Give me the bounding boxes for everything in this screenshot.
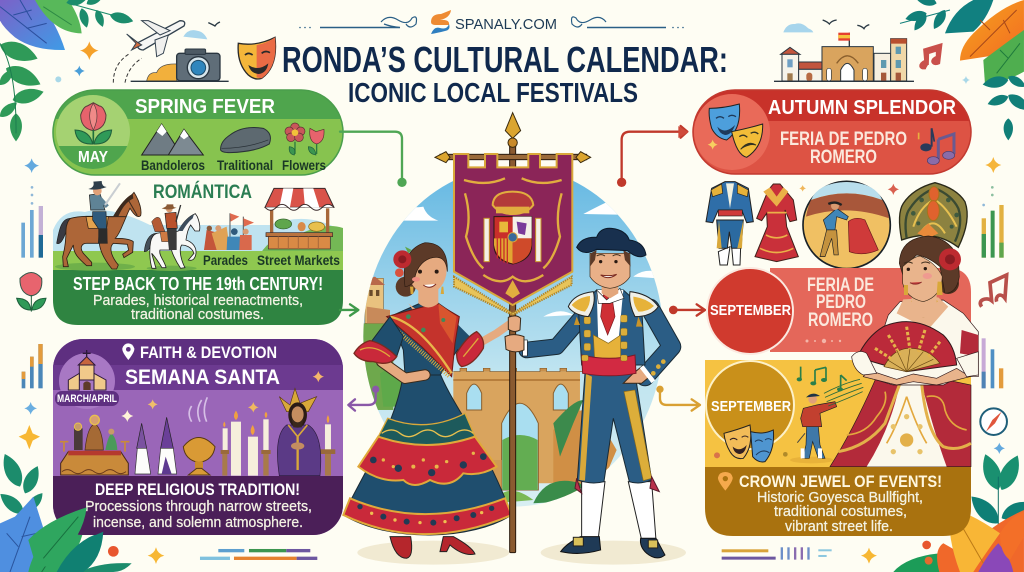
foliage: bottom left: [0, 344, 317, 572]
socks: [582, 482, 605, 538]
panel: september feria: [707, 268, 971, 354]
icon: pin: [718, 472, 733, 491]
badge: september: SEPTEMBER: [711, 399, 791, 415]
badge: september: [707, 268, 793, 354]
subtitle: FERIA DE: [807, 275, 874, 296]
heading: ROMÁNTICA: [153, 181, 252, 203]
title: [282, 39, 728, 108]
procession illustration: [60, 371, 335, 476]
panel: autumn splendor: [693, 90, 971, 174]
right arm: [645, 308, 672, 377]
right side bars: [799, 184, 1004, 258]
description: Processions through narrow streets,: [85, 499, 312, 515]
shawl: [387, 303, 459, 377]
woman with fan: [830, 183, 978, 467]
may badge: MAY: [78, 149, 109, 166]
connectors: [340, 126, 705, 411]
description: Parades, historical reenactments,: [93, 293, 303, 309]
icon: mountains: [142, 124, 203, 155]
callout heading: CROWN JEWEL OF EVENTS!: [739, 472, 942, 491]
icon: bullring scene: [803, 181, 890, 269]
description: Historic Goyesca Bullfight,: [757, 490, 923, 506]
icon: small torero with notes: [790, 367, 863, 463]
bridge: [453, 372, 580, 483]
woman figure: [343, 243, 513, 558]
heading: AUTUMN SPLENDOR: [768, 97, 957, 119]
candles: [221, 411, 335, 476]
subtitle: FERIA DE PEDRO: [780, 129, 907, 150]
ground shadows: [357, 541, 686, 565]
right arm: [473, 322, 513, 347]
foliage: top left: [0, 0, 134, 173]
description: vibrant street life.: [785, 519, 893, 535]
heading: FAITH & DEVOTION: [140, 343, 277, 362]
foliage: top right: [900, 0, 1024, 173]
panel: spring fever: [53, 90, 343, 176]
icon: location pin: [122, 343, 134, 360]
badge: september: [706, 361, 794, 449]
float with saints: [60, 415, 129, 475]
collar and neck: [597, 288, 624, 303]
callout heading: DEEP RELIGIOUS TRADITION!: [95, 480, 300, 499]
arms: [863, 368, 970, 385]
description: traditional costumes.: [131, 307, 264, 323]
title: ICONIC LOCAL FESTIVALS: [348, 77, 638, 108]
heading: SPRING FEVER: [135, 96, 276, 118]
icon: parade crowd: [204, 213, 254, 250]
badge: march april: [55, 350, 119, 409]
label: Flowers: [282, 158, 326, 173]
icon: masks: [714, 425, 788, 462]
shoes: [561, 537, 601, 553]
badge: september: SEPTEMBER: [710, 303, 791, 319]
left arm: [527, 313, 585, 350]
skirt: [830, 377, 971, 467]
icon: music notes: [919, 128, 955, 165]
icon: logo: [431, 10, 451, 34]
epaulettes: [568, 292, 594, 317]
may badge: [56, 95, 130, 169]
heading: SEMANA SANTA: [125, 366, 280, 389]
fan: [857, 322, 957, 372]
headdress, hair and face (drawn in the coordinates of the upper crop): [899, 183, 967, 318]
leaves over semana santa panel: [28, 507, 103, 572]
icon: flamenco dress: [755, 184, 798, 262]
description: [93, 293, 303, 323]
icon: plane and camera: [113, 21, 229, 83]
icon: flowers: [285, 123, 324, 155]
icon: traditional cap: [221, 127, 270, 153]
left side bars and tulip: [17, 186, 46, 312]
costume icons and bullring: [706, 181, 890, 269]
icon: market stall: [265, 188, 334, 249]
clouds: [404, 202, 654, 317]
description: [85, 499, 312, 531]
pants: [577, 373, 652, 483]
panel: semana santa: [53, 339, 343, 536]
left arm: [382, 362, 425, 378]
icon: comedy mask: [238, 37, 276, 79]
description: traditional costumes,: [774, 504, 907, 520]
callout heading: STEP BACK TO THE 19th CENTURY!: [73, 274, 323, 294]
badge: march april: MARCH/APRIL: [57, 393, 117, 405]
description: [757, 490, 923, 535]
hands on pole: [505, 316, 524, 352]
foliage: bottom right: [722, 275, 1024, 572]
title: RONDA’S CULTURAL CALENDAR:: [282, 39, 728, 80]
subtitle: ROMERO: [808, 310, 873, 331]
label: Street Markets: [257, 253, 340, 268]
head: [590, 253, 630, 288]
jacket: [578, 290, 645, 365]
bodice: [857, 300, 978, 385]
characters and banner: [343, 113, 686, 565]
head: [396, 277, 416, 297]
panel: romantica: [53, 181, 343, 326]
subtitle: [780, 129, 907, 168]
icon: large horse and rider: [55, 181, 141, 271]
jesus figure: [277, 388, 321, 476]
man figure: [523, 228, 672, 558]
pole: [435, 113, 591, 553]
nazarenos: [135, 417, 177, 474]
subtitle: PEDRO: [816, 292, 866, 313]
panel: goyesca: [705, 360, 971, 537]
icon: white horse and rider: [144, 204, 200, 271]
small red chevron by autumn panel: [678, 126, 688, 138]
subtitle: ROMERO: [810, 147, 877, 168]
subtitle: [807, 275, 874, 331]
center circle scene: [360, 167, 663, 507]
site name: SPANALY.COM: [455, 17, 557, 33]
label: Bandoleros: [141, 158, 205, 173]
incense: [183, 397, 215, 475]
banner: [454, 154, 572, 315]
icon: suit of lights: [706, 182, 753, 265]
label: Parades: [203, 253, 248, 268]
icon: town skyline: [774, 20, 942, 81]
icon: theatre masks: [694, 94, 770, 170]
header logo and ornaments: [299, 10, 684, 34]
label: Tralitional: [217, 158, 273, 173]
description: incense, and solemn atmosphere.: [93, 515, 303, 531]
